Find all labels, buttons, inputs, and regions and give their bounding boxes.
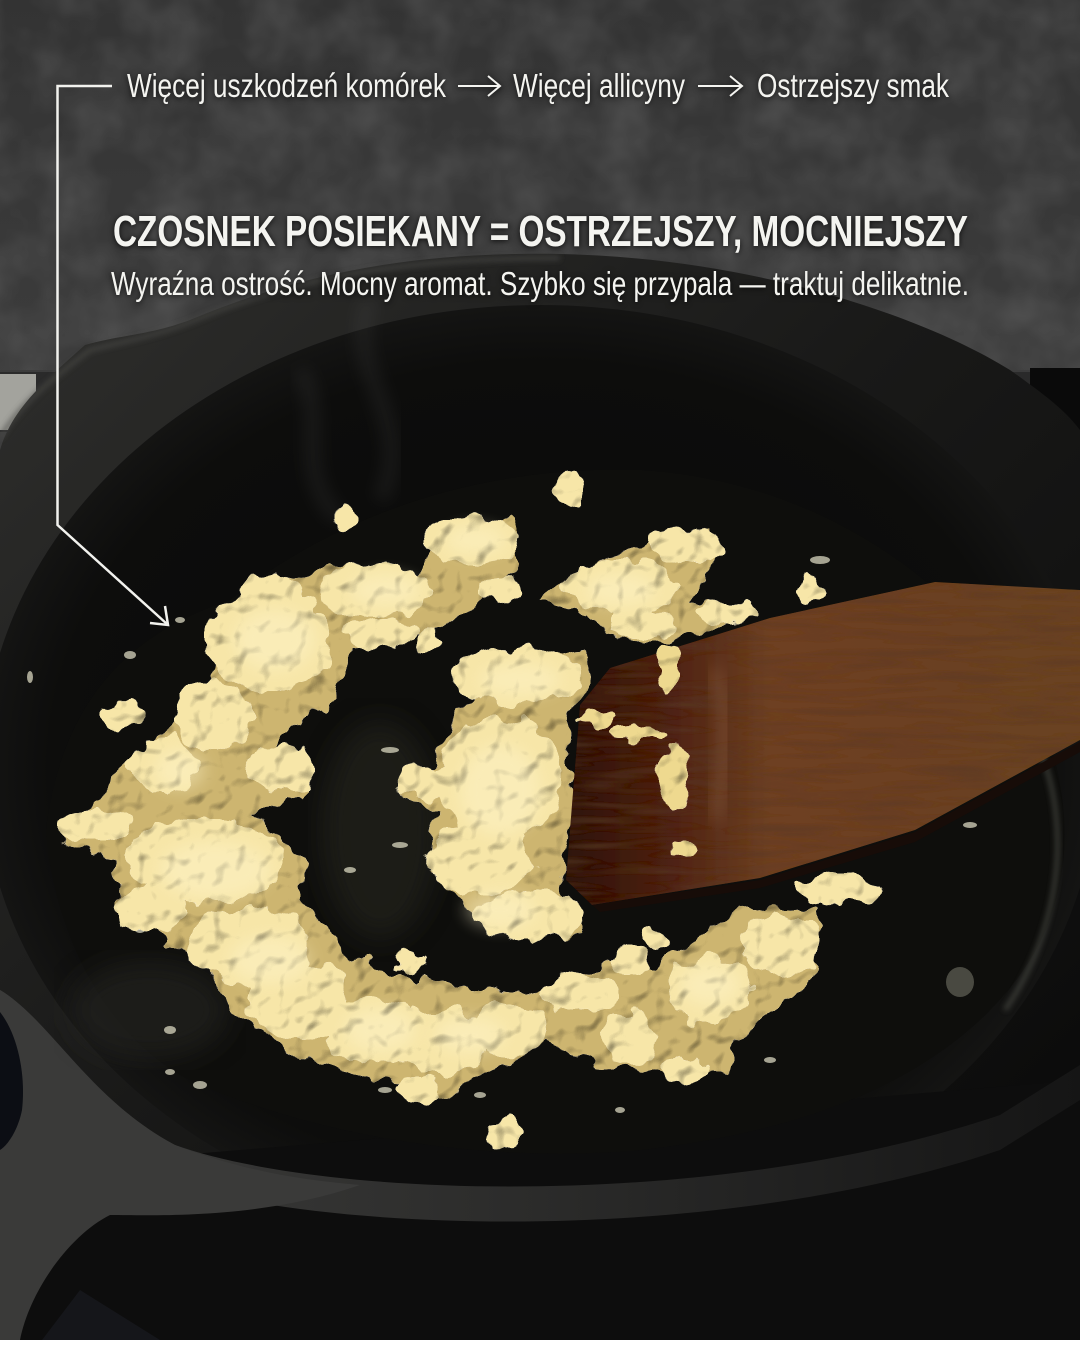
pan floor with oil [46, 470, 1065, 1154]
arrow [458, 76, 500, 96]
connector arrow pointing to garlic [58, 86, 168, 625]
garlic golden base [60, 520, 820, 1098]
pan rim highlight [0, 258, 560, 438]
stove bottom-left [42, 1290, 160, 1340]
pan inner wall [0, 305, 1080, 1235]
spatula lower edge [592, 742, 1080, 912]
lower lit rim [0, 990, 1080, 1222]
oil pool sheen [320, 720, 440, 940]
area below pan [0, 1080, 1080, 1340]
flow step 2: Więcej allicyny [513, 67, 685, 104]
garlic lumps [57, 473, 882, 1149]
arrow [698, 76, 742, 96]
top flow: cause chain [127, 67, 949, 104]
flow step 3: Ostrzejszy smak [757, 67, 949, 104]
wooden spatula [566, 582, 1080, 912]
minced garlic [57, 473, 882, 1149]
lower-left handle [0, 990, 360, 1340]
steam [300, 300, 391, 520]
flow step 1: Więcej uszkodzeń komórek [127, 67, 446, 104]
spatula sheen [710, 670, 726, 820]
handle hole [0, 1012, 23, 1150]
garlic highlights [155, 526, 740, 1053]
inner wall sheen [1005, 750, 1058, 1010]
oil glints [27, 556, 977, 1113]
garlic stuck on spatula [579, 642, 697, 854]
oil pool sheen lower [70, 960, 230, 1060]
white bottom strip [0, 1340, 1080, 1350]
